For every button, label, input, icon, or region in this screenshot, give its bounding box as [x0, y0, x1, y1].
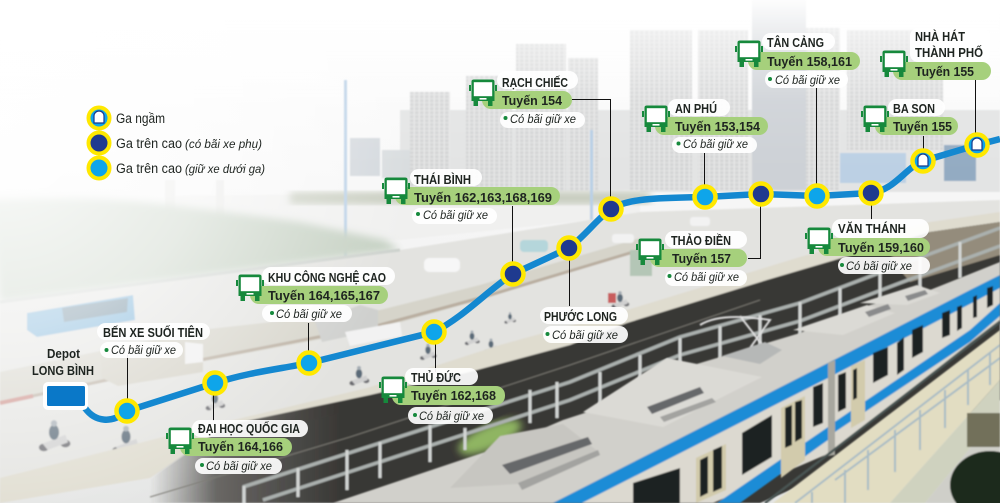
foliage [454, 412, 526, 462]
station: Tân Cảng [735, 33, 860, 88]
station: Phước Long [540, 307, 628, 343]
station: Thảo Điền: Có bãi giữ xe [674, 270, 739, 284]
pantograph [700, 316, 782, 364]
body [553, 275, 1000, 503]
station: Văn Thánh: Tuyến 159,160 [838, 240, 924, 255]
depot: Depot [47, 347, 81, 361]
station: Nhà hát Thành phố: Tuyến 155 [915, 64, 974, 79]
station: An Phú: Tuyến 153,154 [675, 119, 761, 134]
station: Văn Thánh: VĂN THÁNH [838, 221, 906, 236]
left white fade [0, 0, 440, 503]
station: Rạch Chiếc: RẠCH CHIẾC [502, 75, 568, 90]
station: An Phú [642, 99, 768, 153]
railing in front [243, 228, 1000, 500]
cars and buses [27, 217, 769, 454]
station: Rạch Chiếc [469, 71, 585, 128]
station: Khu Công nghệ cao: KHU CÔNG NGHỆ CAO [268, 270, 386, 285]
station: Thảo Điền [636, 231, 747, 286]
windows [633, 468, 680, 503]
leader lines [128, 80, 976, 421]
depot [32, 347, 94, 410]
station: Bến xe Suối Tiên: BẾN XE SUỐI TIÊN [103, 325, 203, 340]
station: Khu Công nghệ cao [236, 267, 395, 322]
station: Thủ Đức [379, 368, 505, 424]
station: Nhà hát Thành phố: NHÀ HÁT [915, 29, 965, 44]
river and far bank [170, 190, 640, 240]
stations [116, 134, 988, 422]
thin lines in shade [150, 300, 760, 497]
station: Đại học Quốc gia: ĐẠI HỌC QUỐC GIA [198, 421, 300, 436]
station: Văn Thánh [805, 219, 930, 274]
station: An Phú: Có bãi giữ xe [683, 137, 748, 151]
station: Thủ Đức: Có bãi giữ xe [419, 409, 484, 423]
legend: elevated with parking below: (giữ xe dưới ga) [185, 162, 265, 176]
station: Văn Thánh: Có bãi giữ xe [846, 259, 912, 273]
station: Nhà hát Thành phố [880, 28, 991, 80]
station: Thái Bình [382, 169, 560, 224]
station: Nhà hát Thành phố: THÀNH PHỐ [915, 45, 983, 60]
legend: elevated with extra parking [88, 132, 262, 154]
cream viaduct parapet [0, 212, 1000, 503]
station: Bến xe Suối Tiên [97, 323, 210, 358]
station: Đại học Quốc gia: Có bãi giữ xe [206, 459, 272, 473]
train [333, 262, 1000, 503]
legend: elevated with extra parking: Ga trên cao [116, 136, 182, 151]
station: Đại học Quốc gia: Tuyến 164,166 [198, 439, 283, 454]
station: Khu Công nghệ cao: Tuyến 164,165,167 [268, 288, 380, 303]
station: Ba Son: BA SON [893, 101, 935, 116]
track walkway and concrete deck [773, 330, 1000, 503]
upper blue stripe [553, 275, 1000, 503]
station: Bến xe Suối Tiên: Có bãi giữ xe [111, 343, 176, 357]
station: Ba Son: Tuyến 155 [893, 119, 952, 134]
trees on the left [0, 198, 400, 302]
skyline buildings [350, 0, 1000, 192]
station: Thái Bình: Có bãi giữ xe [423, 208, 488, 222]
roadway [0, 200, 1000, 503]
station: Tân Cảng: TÂN CẢNG [767, 35, 824, 50]
legend: underground station: Ga ngầm [116, 111, 165, 126]
tree corner [967, 413, 1000, 447]
metro route line [85, 139, 1000, 420]
station: Đại học Quốc gia [166, 420, 308, 474]
station: Thái Bình: THÁI BÌNH [414, 172, 471, 187]
station: Rạch Chiếc: Có bãi giữ xe [510, 112, 576, 126]
station: An Phú: AN PHÚ [675, 101, 717, 116]
legend: elevated with parking below [88, 158, 265, 178]
legend [88, 108, 265, 178]
legend: elevated with parking below: Ga trên cao [116, 161, 182, 176]
station: Rạch Chiếc: Tuyến 154 [502, 93, 563, 108]
median railing [0, 238, 640, 404]
legend: underground station [88, 108, 165, 128]
station: Thủ Đức: Tuyến 162,168 [411, 388, 496, 403]
depot: LONG BÌNH [32, 363, 94, 378]
roof [333, 262, 1000, 503]
station: Khu Công nghệ cao: Có bãi giữ xe [276, 307, 342, 321]
station: Tân Cảng: Có bãi giữ xe [775, 73, 840, 87]
lower blue stripe [717, 303, 1000, 503]
station: Ba Son [861, 99, 958, 135]
legend: elevated with extra parking: (có bãi xe phụ) [185, 137, 262, 151]
station: Tân Cảng: Tuyến 158,161 [767, 54, 852, 69]
station: Thủ Đức: THỦ ĐỨC [411, 370, 462, 385]
underground station icons [918, 138, 982, 166]
upper road railing [0, 250, 400, 302]
dark underside of viaduct [150, 222, 1000, 503]
station: Phước Long: Có bãi giữ xe [552, 328, 618, 342]
station: Thái Bình: Tuyến 162,163,168,169 [414, 190, 552, 205]
station: Thảo Điền: Tuyến 157 [672, 251, 731, 266]
station: Thảo Điền: THẢO ĐIỀN [671, 233, 731, 248]
station: Phước Long: PHƯỚC LONG [544, 309, 617, 324]
